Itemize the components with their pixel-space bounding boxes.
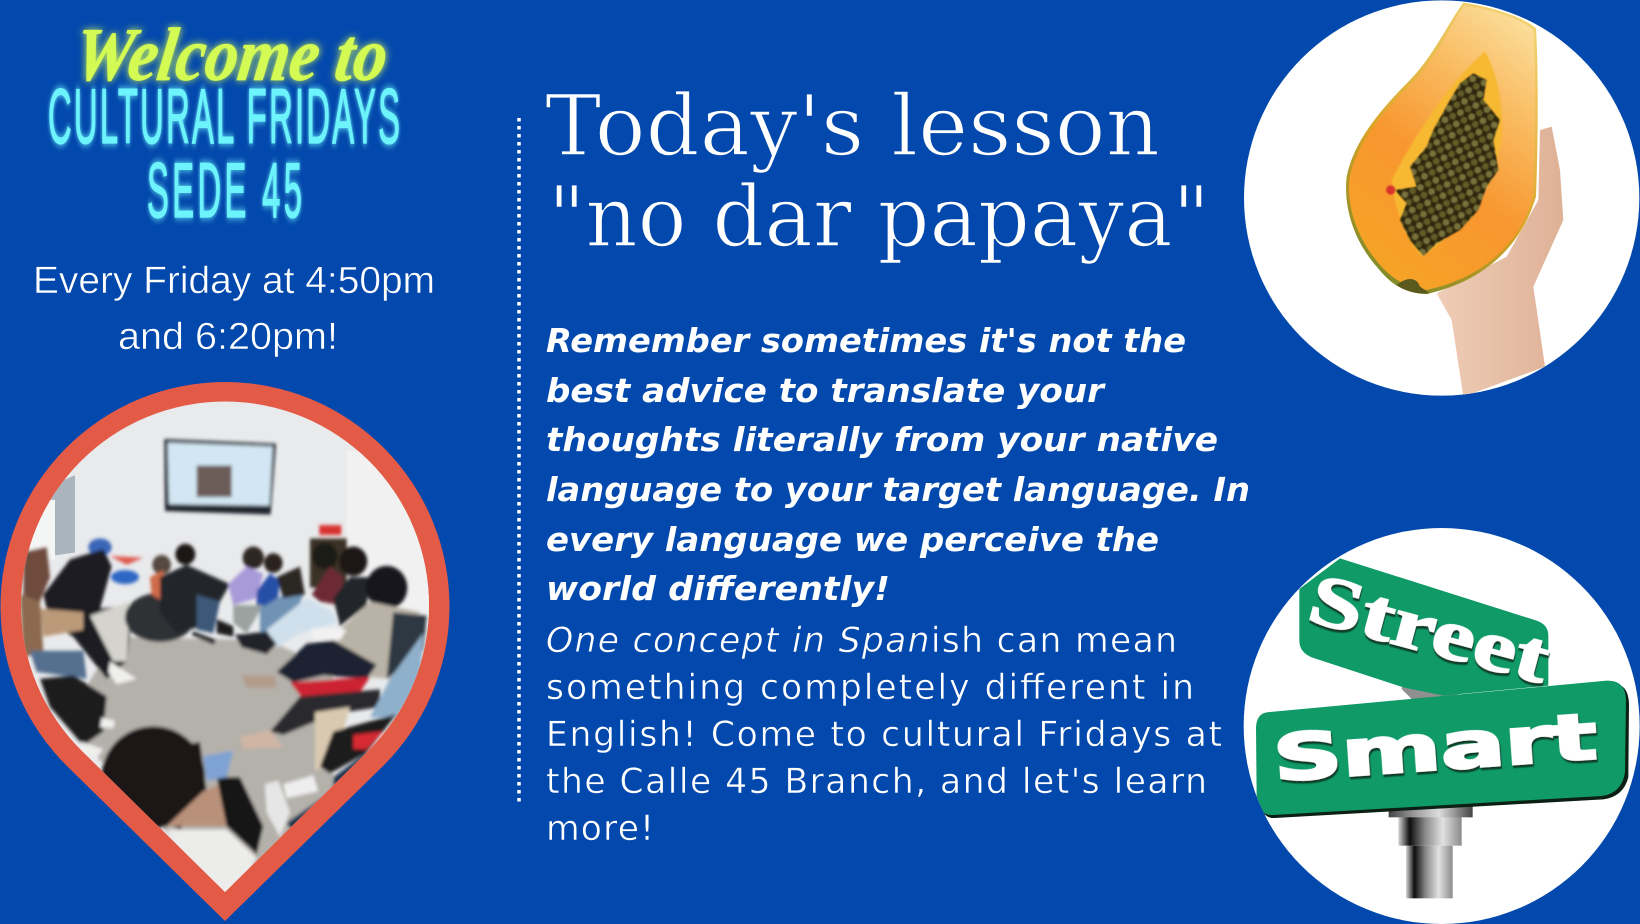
icon: sign post <box>1389 679 1473 898</box>
bold italic advice paragraph: language to your target language. In <box>546 470 1250 509</box>
map pin photo frame <box>0 370 480 924</box>
bold italic advice paragraph <box>546 321 1250 608</box>
pin outline <box>1 382 450 921</box>
bold italic advice paragraph: every language we perceive the <box>546 520 1159 559</box>
street smart sign circle <box>1244 528 1640 924</box>
regular body paragraph <box>546 621 1222 849</box>
dotted divider <box>517 118 521 802</box>
schedule text: and 6:20pm! <box>118 316 338 358</box>
regular body paragraph: One concept in Spanish can mean <box>546 621 1177 661</box>
lesson title <box>545 77 1210 266</box>
papaya image circle <box>1244 0 1639 397</box>
regular body paragraph: English! Come to cultural Fridays at <box>546 715 1222 755</box>
regular body paragraph: more! <box>546 809 654 849</box>
neon title: cultural fridays: CULTURAL FRIDAYS <box>48 73 400 160</box>
lesson title: "no dar papaya" <box>548 168 1210 266</box>
bold italic advice paragraph: Remember sometimes it's not the <box>546 321 1186 360</box>
icon: hand <box>1437 127 1563 397</box>
lesson title: Today's lesson <box>545 77 1160 175</box>
classroom photo <box>21 402 429 892</box>
neon script: welcome to: Welcome to <box>70 12 394 97</box>
smart sign <box>1256 681 1629 818</box>
regular body paragraph: the Calle 45 Branch, and let's learn <box>546 762 1207 802</box>
schedule text: Every Friday at 4:50pm <box>33 260 435 302</box>
bold italic advice paragraph: thoughts literally from your native <box>546 420 1218 459</box>
regular body paragraph: something completely different in <box>546 668 1194 708</box>
neon title: sede 45: SEDE 45 <box>147 147 302 234</box>
street sign <box>1299 558 1558 699</box>
schedule text <box>33 260 435 358</box>
bold italic advice paragraph: best advice to translate your <box>546 371 1106 410</box>
smart sign: Smart <box>1271 699 1599 796</box>
street sign: Street <box>1301 558 1558 699</box>
neon heading <box>48 12 400 234</box>
bold italic advice paragraph: world differently! <box>546 569 890 608</box>
icon: papaya <box>1346 3 1538 294</box>
